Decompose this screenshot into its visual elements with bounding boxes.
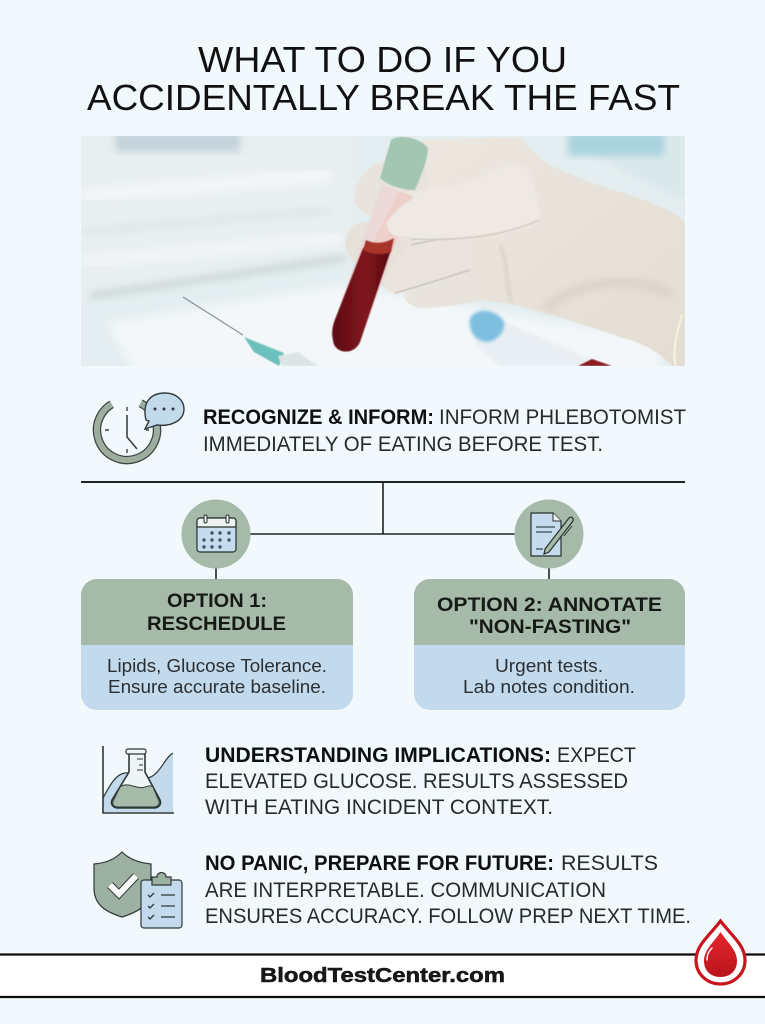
step: no panic, prepare for future bbox=[205, 852, 691, 928]
icon: document and pen bbox=[514, 500, 584, 568]
step: understanding implications: UNDERSTANDING IMPLICATIONS: bbox=[205, 744, 551, 767]
icon: calendar bbox=[182, 500, 250, 568]
footer website: BloodTestCenter.com bbox=[260, 965, 505, 987]
option 2 heading: "NON-FASTING" bbox=[469, 616, 631, 638]
step: no panic, prepare for future: RESULTS bbox=[561, 852, 658, 875]
option 1 heading: RESCHEDULE bbox=[147, 613, 286, 635]
icon: clock with speech bubble bbox=[87, 390, 184, 470]
step: recognize and inform bbox=[203, 406, 686, 456]
tube bbox=[332, 186, 400, 352]
option 1 description: Ensure accurate baseline. bbox=[108, 677, 326, 697]
option 2 description bbox=[463, 656, 635, 697]
step: understanding implications bbox=[205, 744, 636, 819]
thumb bbox=[432, 232, 471, 239]
photo: gloved hand holding a blood tube bbox=[70, 130, 685, 372]
white paper on bench bbox=[107, 285, 660, 372]
option 2 description: Lab notes condition. bbox=[463, 677, 635, 697]
step: no panic, prepare for future: NO PANIC, PREPARE FOR FUTURE: bbox=[205, 852, 554, 875]
little finger bbox=[404, 274, 480, 308]
icon: flask on chart bbox=[103, 746, 174, 813]
step: no panic, prepare for future: ARE INTERPRETABLE. COMMUNICATION bbox=[205, 879, 606, 902]
title: ACCIDENTALLY BREAK THE FAST bbox=[87, 77, 680, 118]
index finger behind tube bbox=[354, 161, 417, 217]
option 1 heading: OPTION 1: bbox=[167, 590, 267, 612]
step: understanding implications: ELEVATED GLUCOSE. RESULTS ASSESSED bbox=[205, 770, 628, 793]
title: WHAT TO DO IF YOU bbox=[198, 39, 567, 80]
icon: blood drop logo bbox=[696, 921, 745, 984]
step: recognize and inform: IMMEDIATELY OF EATING BEFORE TEST. bbox=[203, 433, 603, 456]
step: understanding implications: WITH EATING INCIDENT CONTEXT. bbox=[205, 796, 553, 819]
option 1 description: Lipids, Glucose Tolerance. bbox=[107, 656, 327, 676]
step: recognize and inform: RECOGNIZE & INFORM: bbox=[203, 406, 434, 429]
glove back of hand bbox=[405, 137, 685, 366]
step: recognize and inform: INFORM PHLEBOTOMIST bbox=[439, 406, 686, 429]
option 2 description: Urgent tests. bbox=[495, 656, 603, 676]
title bbox=[87, 39, 680, 118]
option 1 heading bbox=[147, 590, 286, 635]
decision tree connector bbox=[81, 482, 685, 579]
step: understanding implications: EXPECT bbox=[557, 744, 636, 767]
syringe bbox=[183, 297, 243, 335]
footer band bbox=[0, 954, 765, 997]
icon: shield and checklist bbox=[94, 852, 182, 928]
panel: option 1 reschedule bbox=[81, 579, 353, 710]
option 2 heading: OPTION 2: ANNOTATE bbox=[437, 594, 662, 616]
panel: option 2 annotate non-fasting bbox=[414, 579, 685, 710]
option 1 description bbox=[107, 656, 327, 697]
step: no panic, prepare for future: ENSURES ACCURACY. FOLLOW PREP NEXT TIME. bbox=[205, 905, 691, 928]
middle finger bbox=[345, 221, 417, 287]
option 2 heading bbox=[437, 594, 662, 638]
tube cap bbox=[380, 137, 428, 190]
ring finger bbox=[386, 240, 458, 294]
blue-capped tube in background bbox=[478, 325, 588, 364]
blurred analyser machine bbox=[70, 130, 350, 296]
